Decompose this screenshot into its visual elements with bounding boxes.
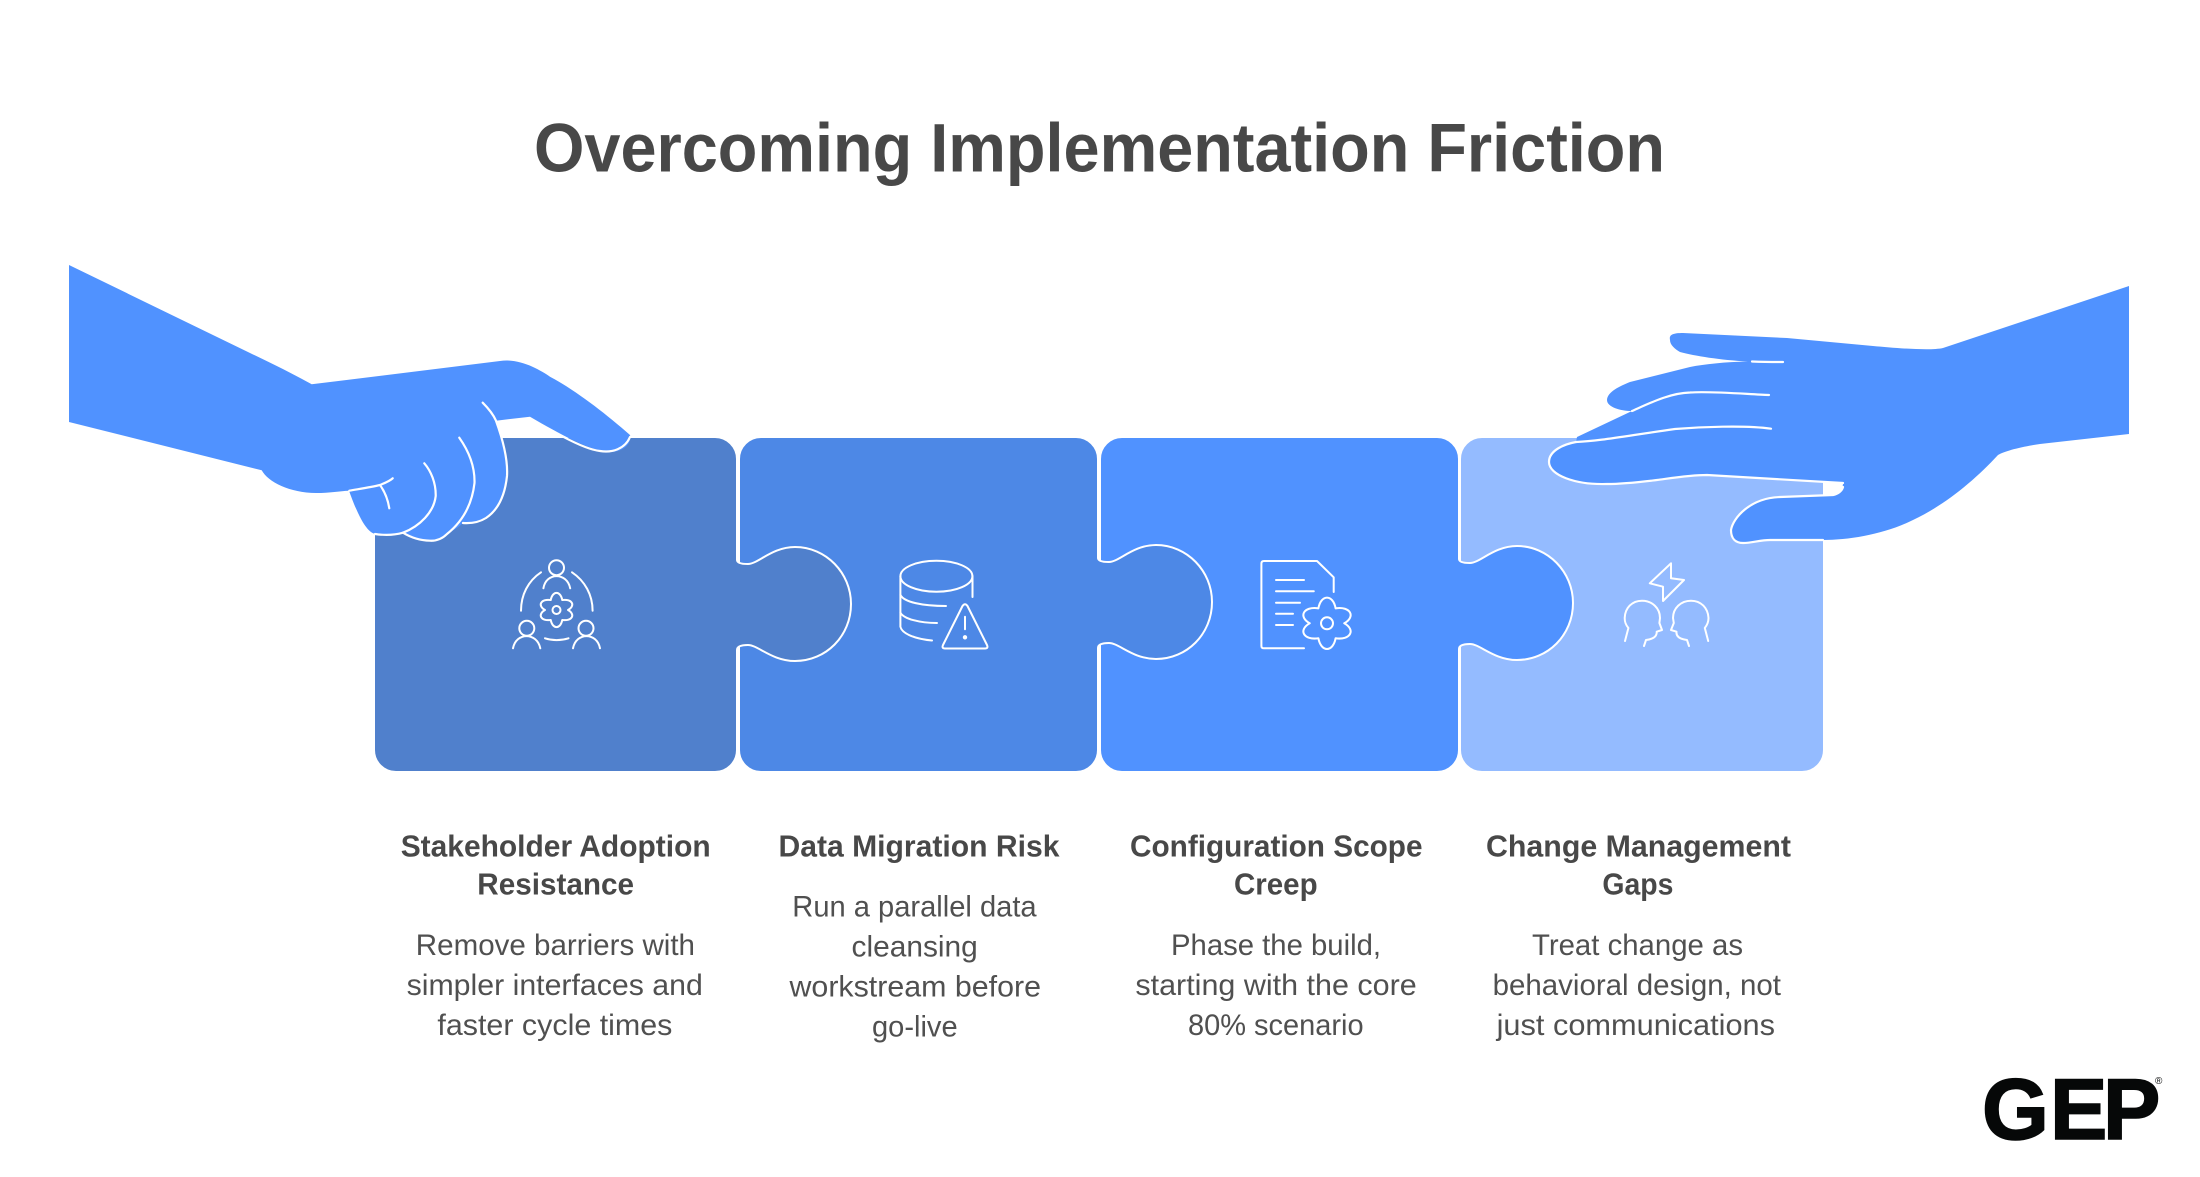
heading: Gaps: [1602, 866, 1673, 902]
body: Remove barriers with: [416, 929, 695, 962]
body: faster cycle times: [437, 1009, 672, 1042]
icon: database with warning: [900, 561, 987, 648]
body: go-live: [872, 1011, 958, 1044]
icon: stakeholders around gear: [513, 560, 600, 648]
right hand resting on the puzzle: [1549, 286, 2129, 543]
heading: Creep: [1234, 866, 1318, 902]
puzzle piece 3: configuration scope: [1100, 437, 1573, 772]
puzzle piece 1: stakeholder adoption: [374, 437, 851, 772]
logo: GEP: E: [2050, 1062, 2107, 1158]
logo: GEP: P: [2103, 1062, 2160, 1158]
body: Treat change as: [1532, 929, 1743, 962]
left hand pointing onto the puzzle: [69, 265, 630, 541]
text column 3: configuration scope: [1130, 829, 1422, 1042]
puzzle piece 2: data migration: [739, 437, 1212, 772]
body: Run a parallel data: [792, 891, 1037, 924]
heading: Stakeholder Adoption: [401, 829, 711, 864]
text column 4: change management: [1486, 829, 1791, 1042]
body: starting with the core: [1135, 969, 1417, 1002]
body: Phase the build,: [1171, 929, 1381, 962]
heading: Data Migration Risk: [778, 829, 1060, 864]
text column 1: stakeholder adoption: [401, 829, 711, 1042]
body: simpler interfaces and: [407, 969, 703, 1002]
text column 2: data migration: [778, 829, 1060, 1044]
body: 80% scenario: [1188, 1009, 1364, 1042]
body: cleansing: [852, 931, 978, 964]
body: behavioral design, not: [1493, 969, 1782, 1002]
puzzle piece 4: change management: [1460, 437, 1824, 772]
title: Overcoming Implementation Friction: [534, 110, 1665, 186]
body: workstream before: [788, 971, 1041, 1004]
icon: two heads with conflict bolt: [1625, 563, 1708, 646]
heading: Resistance: [477, 866, 634, 902]
logo: GEP: G: [1982, 1062, 2049, 1158]
logo: GEP: [1982, 1062, 2163, 1158]
icon: document with gear: [1261, 561, 1351, 649]
logo: GEP: ®: [2155, 1076, 2163, 1087]
heading: Change Management: [1486, 829, 1791, 864]
body: just communications: [1496, 1009, 1775, 1042]
heading: Configuration Scope: [1130, 829, 1422, 864]
